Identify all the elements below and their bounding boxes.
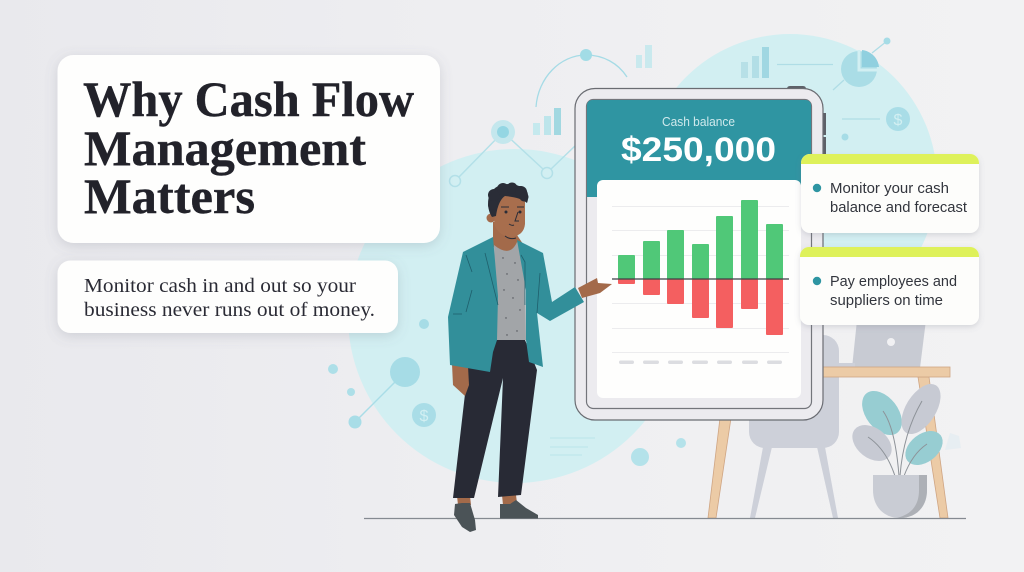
decorative line graph xyxy=(450,120,576,186)
jacket xyxy=(448,237,584,372)
decorative arc with bars xyxy=(533,45,652,135)
laptop xyxy=(836,320,926,368)
desk xyxy=(708,367,950,518)
cash balance label: Cash balance xyxy=(662,115,735,129)
plant pot xyxy=(873,475,927,518)
decorative dots bottom left xyxy=(328,319,686,466)
title card xyxy=(58,55,440,243)
subtitle card xyxy=(58,260,398,333)
floor line xyxy=(364,518,966,520)
shirt xyxy=(494,242,526,340)
left shoe xyxy=(454,503,476,532)
right shoe xyxy=(500,500,538,518)
title line 1: Why Cash Flow xyxy=(83,71,414,127)
tablet body xyxy=(575,88,823,420)
teal header xyxy=(587,100,811,197)
face xyxy=(494,195,525,237)
decorative icons top right: $ xyxy=(894,112,903,129)
info card: pay employees: suppliers on time xyxy=(830,293,943,309)
left hand xyxy=(452,364,469,396)
info card: monitor cash balance: balance and forecast xyxy=(830,200,967,216)
subtitle line 1: Monitor cash in and out so your xyxy=(84,276,357,297)
hair xyxy=(488,182,528,217)
tablet xyxy=(575,86,826,420)
info card: monitor cash balance xyxy=(801,154,979,233)
cash balance value: $250,000 xyxy=(621,131,776,169)
person presenting xyxy=(448,182,612,532)
info card: monitor cash balance: Monitor your cash xyxy=(830,181,949,197)
chair xyxy=(749,335,839,518)
chart card xyxy=(597,180,801,398)
tablet buttons xyxy=(787,86,826,160)
info card: pay employees: Pay employees and xyxy=(830,274,957,290)
facial features xyxy=(501,207,524,239)
decorative dots bottom left: $ xyxy=(420,408,429,425)
shirt speckles xyxy=(502,257,521,336)
plant xyxy=(852,384,961,518)
pointing hand xyxy=(578,278,612,298)
ear xyxy=(486,214,496,222)
title line 2: Management xyxy=(84,120,366,176)
background blobs xyxy=(348,34,937,483)
bar chart xyxy=(612,200,789,364)
subtitle line 2: business never runs out of money. xyxy=(84,300,375,321)
info card: pay employees xyxy=(800,247,979,325)
neck xyxy=(493,222,525,254)
infographic canvas xyxy=(51,34,980,532)
ankles xyxy=(457,495,517,505)
trousers xyxy=(453,340,537,498)
title line 3: Matters xyxy=(84,168,255,224)
decorative icons top right xyxy=(741,38,910,140)
